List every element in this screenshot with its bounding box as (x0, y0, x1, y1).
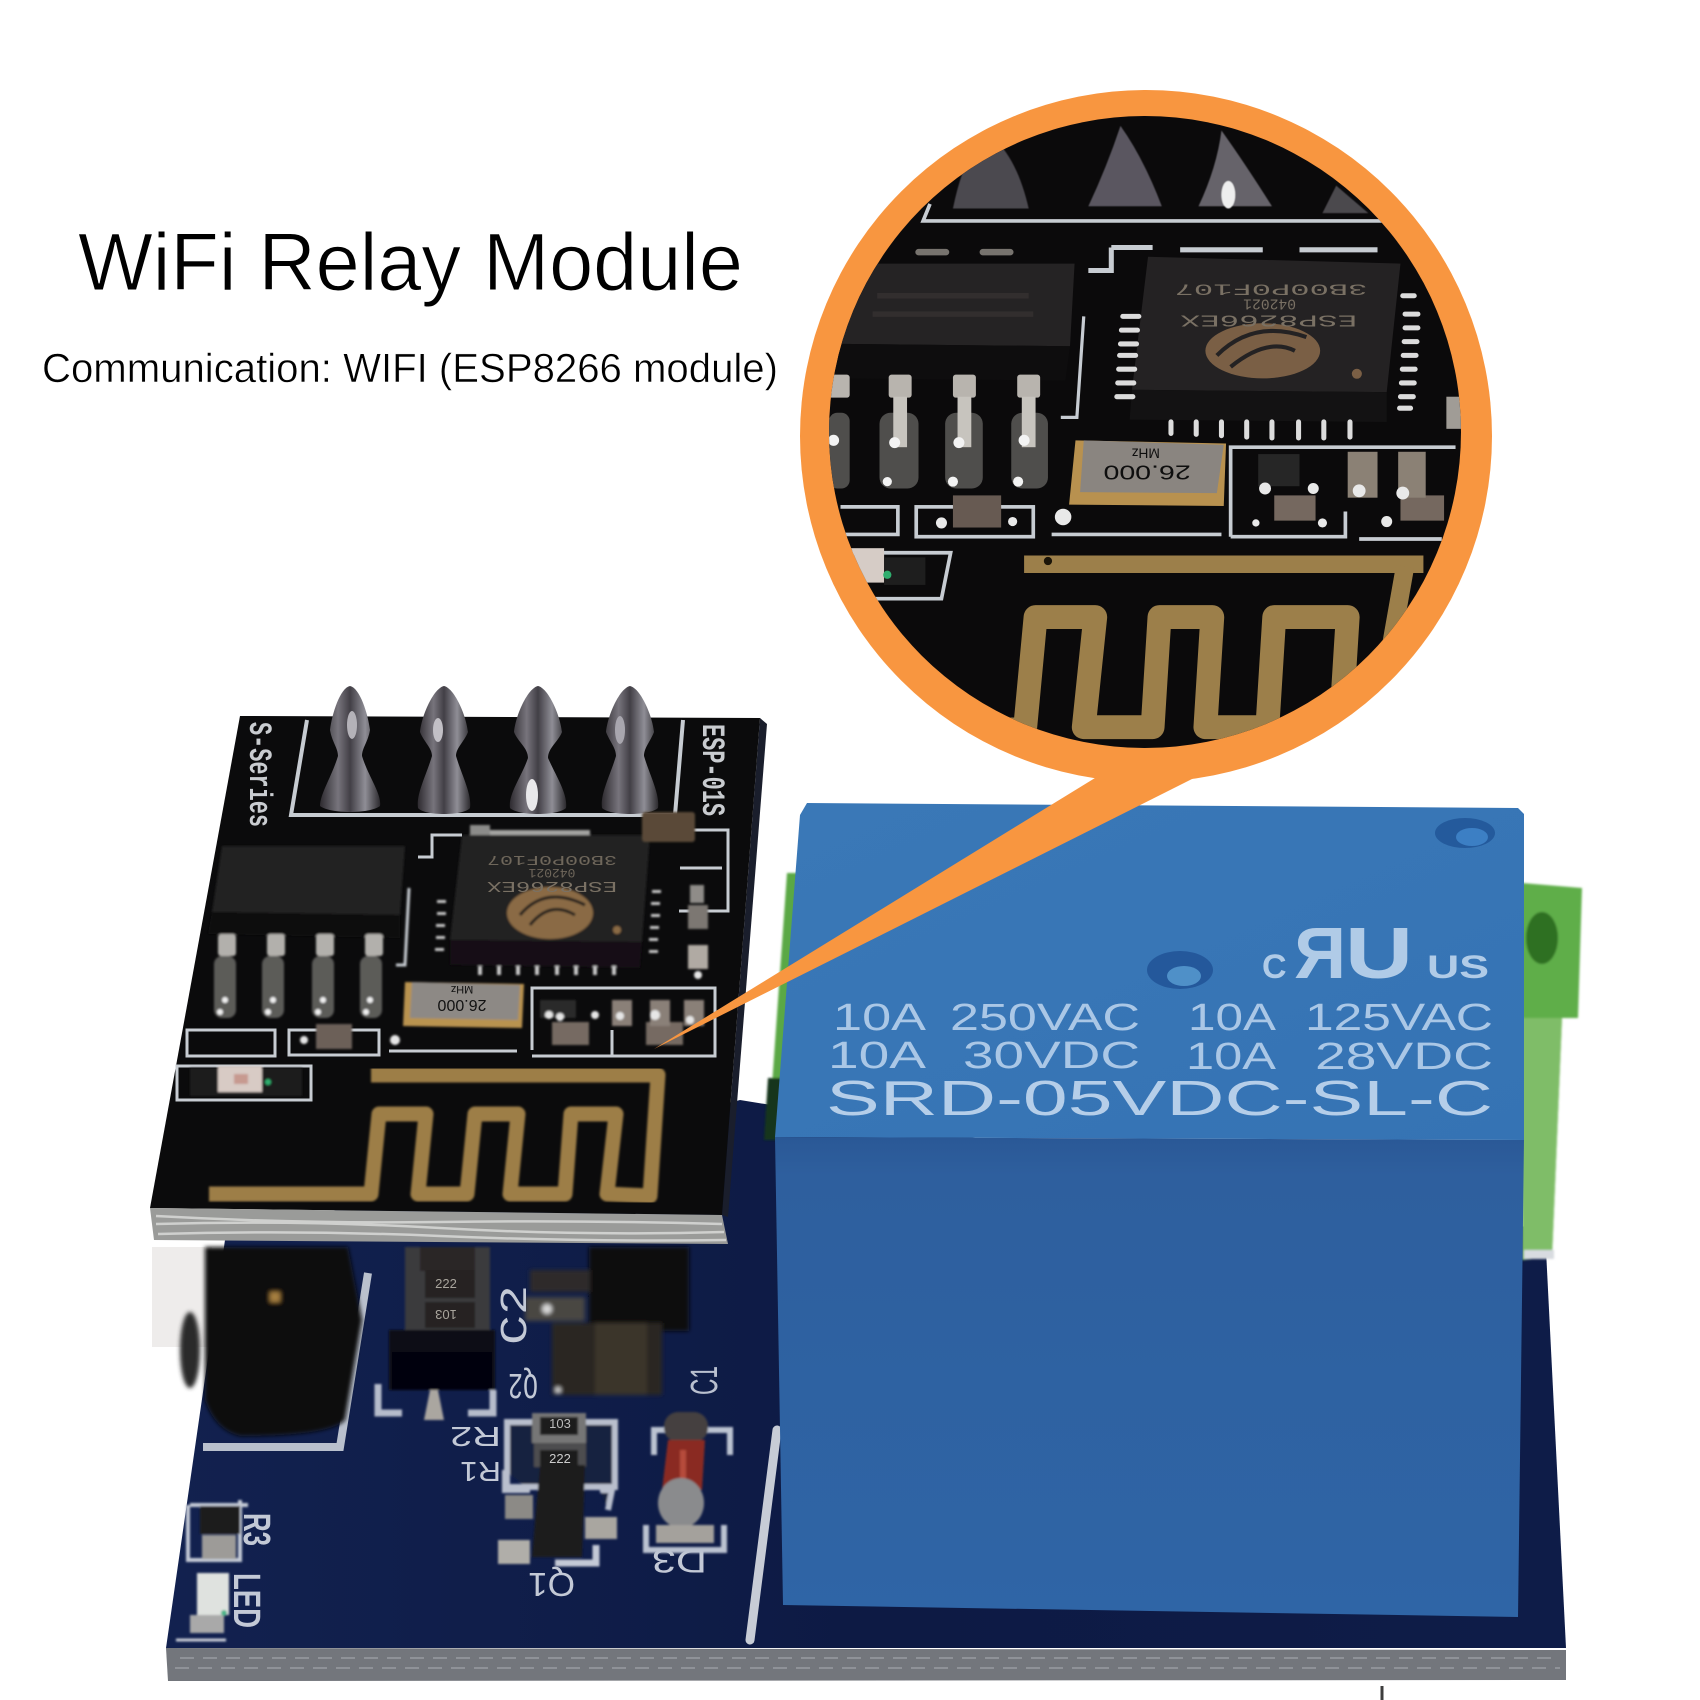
thin wire (1380, 1686, 1384, 1700)
silk label Q2: Q2 (508, 1363, 538, 1404)
chip marking ESP8266EX: ESP8266EX (487, 877, 617, 894)
pcb top surface (166, 1100, 1566, 1648)
orange magnifier ring (800, 90, 1492, 782)
magnified crystal text 26.000: 26.000 (1103, 461, 1191, 483)
resistor code 222: 222 (435, 1276, 457, 1291)
pin header silk outline (291, 720, 683, 815)
certification mark: R (1294, 914, 1346, 994)
magnified chip text lot code: 3B00P0F107 (1175, 279, 1367, 297)
magnified smd parts (845, 397, 1465, 585)
magnified silk boxes (840, 447, 1456, 599)
magnified content (828, 126, 1465, 729)
crystal (403, 982, 524, 1028)
D3 diode (646, 1412, 730, 1550)
smd components (300, 812, 708, 1049)
resistor stack (378, 1247, 495, 1420)
magnified flash chip (828, 252, 1084, 489)
magnified crystal (1069, 440, 1226, 506)
relay rating line 2 (828, 1035, 1493, 1078)
resistor code 103: 103 (435, 1307, 457, 1322)
magnified ESP chip (1088, 248, 1418, 438)
silk pads and boxes (177, 830, 728, 1100)
silk text ESP-01S: ESP-01S (693, 724, 730, 816)
resistor label 103 second: 103 (549, 1416, 571, 1431)
certification mark (1262, 914, 1489, 994)
magnified chip text ESP8266EX: ESP8266EX (1180, 310, 1357, 329)
white connector (152, 1247, 212, 1347)
certification mark: US (1427, 949, 1489, 985)
relay rating line 2: 30VDC (963, 1035, 1140, 1077)
relay front face (775, 1137, 1524, 1617)
magnified board view (829, 116, 1461, 748)
status LED (190, 1066, 302, 1096)
magnified antenna via (1044, 557, 1052, 565)
silk label D3: D3 (652, 1543, 707, 1579)
right green terminal (1522, 883, 1582, 1260)
silk label R1: R1 (460, 1456, 501, 1487)
board top surface (150, 716, 760, 1215)
resistors and Q1 transistor (498, 1413, 617, 1564)
gold antenna trace (209, 1075, 658, 1196)
relay rating line 2: 10A (1186, 1036, 1277, 1078)
crystal text MHz: MHz (451, 983, 473, 995)
silk label LED: LED (225, 1573, 267, 1628)
magnified background (829, 116, 1461, 748)
relay model number: SRD-05VDC-SL-C (826, 1072, 1493, 1126)
silk outline around black switch (203, 1273, 368, 1447)
relay rating line 1 (833, 997, 1493, 1039)
relay rating line 1: 125VAC (1305, 997, 1493, 1039)
certification mark: U (1345, 914, 1413, 994)
ESP-01S WiFi module (150, 686, 767, 1244)
silk label R2: R2 (450, 1421, 501, 1452)
ESP8266 chip (435, 825, 661, 975)
four header pins (320, 686, 658, 814)
title: WiFi Relay Module (78, 217, 743, 308)
magnified crystal text MHz: MHz (1131, 446, 1160, 461)
board right edge (722, 718, 767, 1217)
subtitle: Communication: WIFI (ESP8266 module) (42, 345, 778, 391)
crystal text 26.000: 26.000 (437, 996, 486, 1013)
certification mark: C (1262, 948, 1287, 986)
black switch component (180, 1247, 362, 1436)
relay center hole (1147, 951, 1213, 989)
pcb gray edge (166, 1648, 1566, 1681)
silk label R3: R3 (235, 1513, 277, 1546)
blue relay (775, 803, 1524, 1617)
callout tail (654, 778, 1194, 1049)
magnified antenna trace (1001, 564, 1423, 729)
magnified chip text 042021: 042021 (1243, 294, 1296, 310)
chip marking lot code: 3B00P0F107 (487, 851, 617, 867)
relay rating line 1: 250VAC (950, 997, 1140, 1039)
lower blue relay PCB (152, 1100, 1566, 1700)
magnified pins (953, 126, 1368, 213)
flash chip (208, 846, 409, 1018)
magnified silk outline (923, 204, 1382, 221)
relay rating line 2: 10A (828, 1035, 927, 1077)
relay rating line 1: 10A (1188, 997, 1277, 1039)
left green terminal (764, 873, 812, 1140)
board gray edge (150, 1208, 728, 1244)
silk label C2: C2 (495, 1285, 538, 1345)
silk dividing line (750, 1430, 777, 1640)
relay rating line 1: 10A (833, 997, 927, 1039)
R3 and LED parts (176, 1500, 248, 1640)
chip marking 042021: 042021 (528, 865, 575, 880)
silk label Q1: Q1 (528, 1566, 575, 1603)
resistor label 222 second: 222 (549, 1451, 571, 1466)
silk text S-Series: S-Series (240, 722, 277, 827)
shadowed components under ESP board (525, 1247, 689, 1395)
silk label C1: C1 (684, 1366, 726, 1395)
relay top face (775, 803, 1524, 1140)
relay vent hole top right (1435, 818, 1495, 848)
relay rating line 2: 28VDC (1315, 1036, 1493, 1078)
